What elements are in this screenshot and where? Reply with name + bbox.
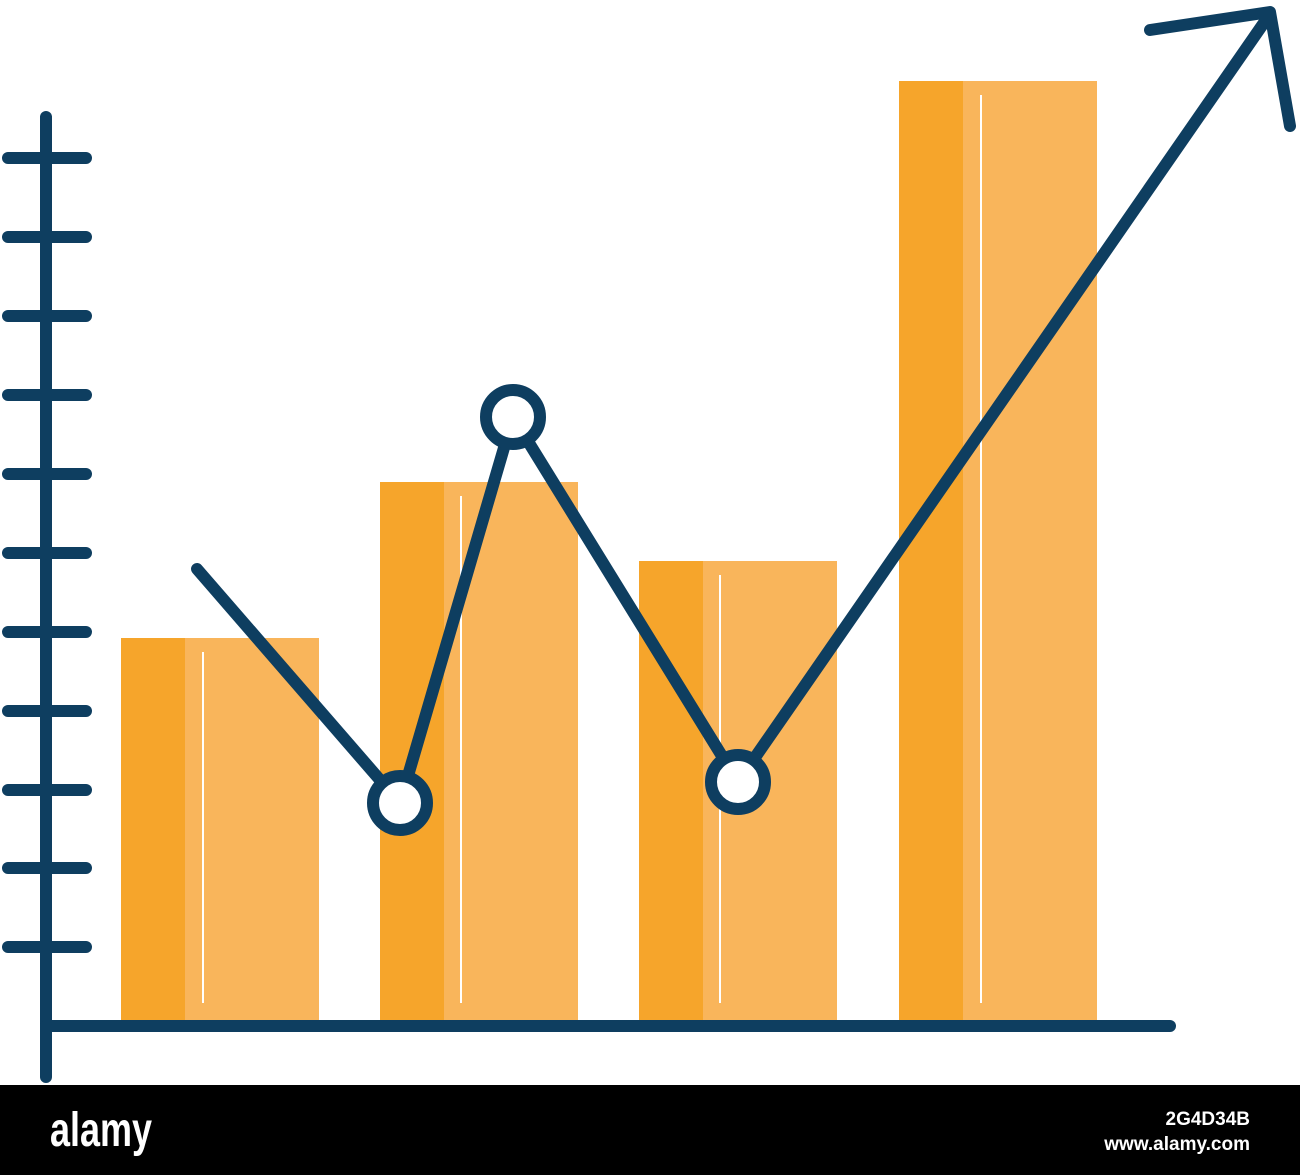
bars [121, 81, 1097, 1023]
bar 3 [639, 561, 837, 1023]
bar 1 [121, 638, 319, 1023]
footer band: www.alamy.com [1103, 1134, 1250, 1155]
trend line arrow [197, 12, 1290, 830]
bar 2 [380, 482, 578, 1023]
footer band [0, 1085, 1300, 1175]
footer band: 2G4D34B [1166, 1109, 1250, 1130]
axes [8, 117, 1170, 1077]
footer band: alamy [50, 1104, 152, 1157]
bar 4 [899, 81, 1097, 1023]
